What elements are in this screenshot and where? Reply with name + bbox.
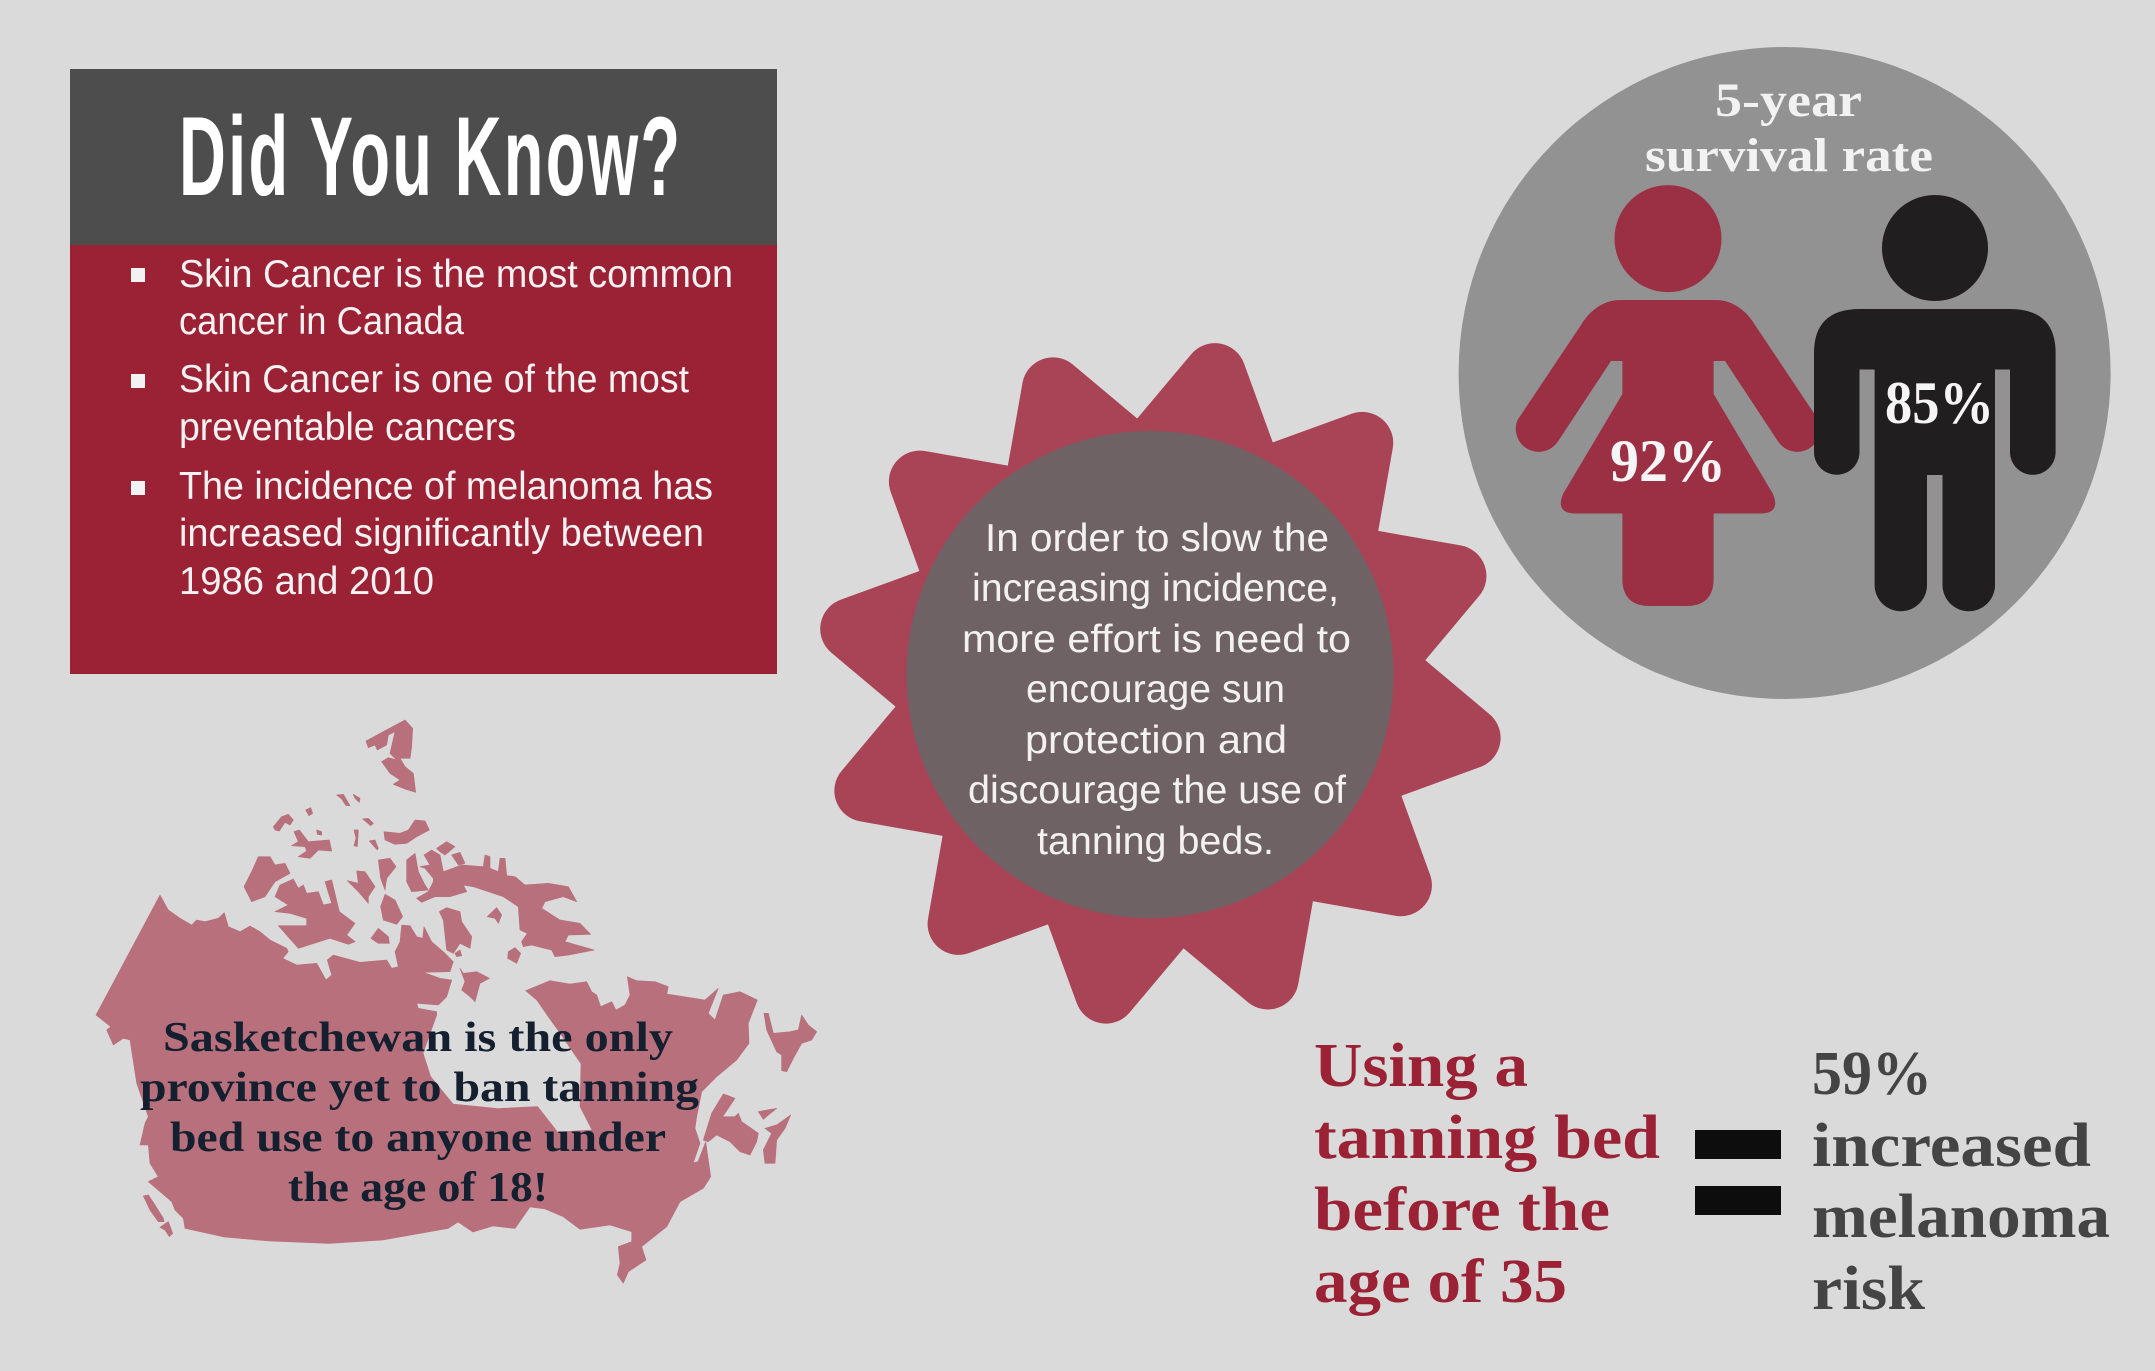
- map caption: bed use to anyone under: [170, 1115, 666, 1161]
- panel header: [70, 69, 777, 245]
- tanning statement: age of 35: [1314, 1248, 1567, 1316]
- map caption: Sasketchewan is the only: [163, 1015, 673, 1061]
- survival heading: survival rate: [1645, 129, 1933, 182]
- star message: encourage sun: [1026, 668, 1285, 711]
- star shape: [809, 332, 1512, 1035]
- grey disc: [1459, 47, 2111, 699]
- pacific islands: [143, 1195, 173, 1237]
- star message: In order to slow the: [985, 517, 1329, 560]
- melanoma risk statement: risk: [1812, 1255, 1926, 1323]
- panel: did you know: [70, 69, 777, 674]
- melanoma risk statement: [1812, 1040, 2110, 1323]
- bullet list: Skin Cancer is the most common: [179, 253, 733, 296]
- bullet list: increased significantly between: [179, 512, 704, 555]
- heading: Did You Know?: Did You Know?: [179, 95, 680, 219]
- bullet list: [131, 253, 733, 603]
- equals sign: [1695, 1130, 1781, 1215]
- bullet list: preventable cancers: [179, 406, 516, 449]
- inner circle: [906, 431, 1394, 918]
- survival heading: 5-year: [1715, 74, 1862, 127]
- star message: increasing incidence,: [972, 567, 1339, 610]
- icon: woman: [1516, 185, 1820, 606]
- survival rate circle: [1459, 47, 2111, 699]
- starburst badge: [809, 332, 1512, 1035]
- map caption: province yet to ban tanning: [140, 1065, 699, 1111]
- bullet list: Skin Cancer is one of the most: [179, 358, 689, 401]
- melanoma risk statement: increased: [1812, 1112, 2091, 1180]
- bullet list: 1986 and 2010: [179, 560, 434, 603]
- map caption: [140, 1015, 699, 1211]
- icon: man: [1814, 195, 2056, 611]
- bullet list: The incidence of melanoma has: [179, 465, 713, 508]
- star message: [962, 517, 1351, 863]
- tanning statement: tanning bed: [1314, 1104, 1660, 1172]
- survival heading: [1645, 74, 1933, 182]
- star message: tanning beds.: [1037, 820, 1274, 863]
- map caption: the age of 18!: [288, 1165, 548, 1211]
- label: 85%: 85%: [1885, 370, 1994, 436]
- tanning statement: before the: [1314, 1176, 1610, 1244]
- tanning statement: Using a: [1314, 1032, 1528, 1100]
- star message: discourage the use of: [968, 769, 1346, 812]
- map of Canada: [96, 720, 817, 1283]
- melanoma risk statement: 59%: [1812, 1040, 1932, 1108]
- bullet list: cancer in Canada: [179, 300, 464, 343]
- label: 92%: 92%: [1610, 428, 1726, 494]
- melanoma risk statement: melanoma: [1812, 1183, 2110, 1251]
- tanning statement: [1314, 1032, 1660, 1316]
- star message: protection and: [1025, 719, 1287, 762]
- atlantic islands: [703, 1013, 817, 1163]
- panel body: [70, 245, 777, 674]
- arctic islands: [244, 720, 594, 1002]
- star message: more effort is need to: [962, 618, 1351, 661]
